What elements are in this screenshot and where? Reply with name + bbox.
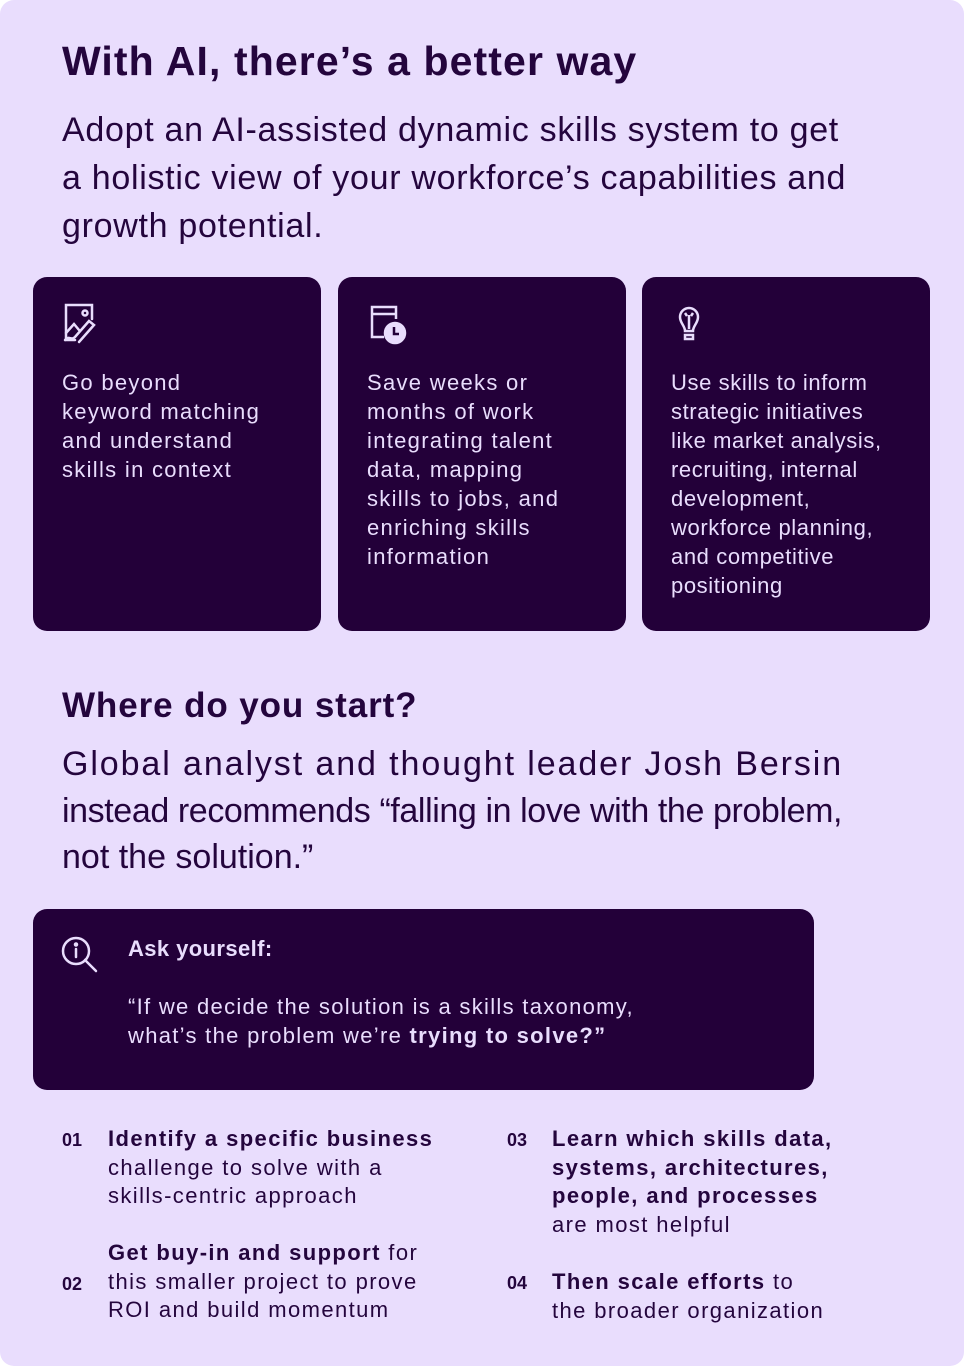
step 03: are most helpful (552, 1212, 731, 1236)
card: save time (338, 277, 626, 631)
step 04: Then scale efforts to (552, 1269, 794, 1294)
icon: image pen (64, 304, 96, 344)
card: strategy: like market analysis, (671, 428, 882, 453)
quote text: instead recommends “falling in love with the problem, (62, 792, 842, 830)
step 01 (62, 1126, 433, 1208)
step 04: the broader organization (552, 1298, 824, 1322)
step 02: ROI and build momentum (108, 1297, 389, 1322)
intro text (62, 111, 846, 245)
callout: ask yourself: what’s the problem we’re trying to solve?” (128, 1023, 606, 1048)
card: context: and understand (62, 428, 233, 453)
icon: lightbulb (678, 306, 700, 340)
step 02: Get buy-in and support for (108, 1240, 418, 1265)
card: save time: enriching skills (367, 515, 531, 540)
quote text: not the solution.” (62, 838, 313, 876)
step 03: Learn which skills data, (552, 1126, 833, 1151)
step 04 (507, 1269, 824, 1322)
step 02: this smaller project to prove (108, 1268, 418, 1294)
card: context: skills in context (62, 457, 232, 482)
card: strategy: Use skills to inform (671, 370, 868, 395)
quote text (62, 745, 843, 876)
step 03: 03 (507, 1130, 527, 1150)
card: context (33, 277, 321, 631)
step 02: 02 (62, 1274, 82, 1294)
step 01: Identify a specific business (108, 1126, 433, 1151)
card: save time: integrating talent (367, 428, 553, 453)
card: strategy: recruiting, internal (671, 457, 858, 482)
step 03 (507, 1126, 833, 1236)
card: strategy (642, 277, 930, 631)
card: save time: data, mapping (367, 457, 523, 482)
card: context: Go beyond (62, 370, 181, 395)
card: save time: months of work (367, 399, 534, 424)
heading: where do you start: Where do you start? (62, 686, 417, 725)
card: strategy: positioning (671, 573, 783, 598)
card: save time: Save weeks or (367, 370, 528, 395)
card: strategy: workforce planning, (671, 515, 873, 540)
title: With AI, there’s a better way (62, 38, 637, 84)
intro text: a holistic view of your workforce’s capabilities and (62, 159, 846, 197)
card: context: keyword matching (62, 399, 260, 424)
card: strategy: development, (671, 486, 810, 511)
step 03: systems, architectures, (552, 1154, 829, 1180)
callout: ask yourself: “If we decide the solution is a skills taxonomy, (128, 994, 634, 1019)
step 02 (62, 1240, 418, 1322)
intro text: Adopt an AI-assisted dynamic skills system to get (62, 111, 839, 149)
quote text: Global analyst and thought leader Josh Bersin (62, 745, 843, 783)
card: save time: skills to jobs, and (367, 486, 559, 511)
card: strategy: strategic initiatives (671, 399, 863, 424)
intro text: growth potential. (62, 207, 323, 245)
card: save time: information (367, 544, 490, 569)
callout: ask yourself: Ask yourself: (128, 936, 273, 961)
step 01: skills-centric approach (108, 1183, 358, 1208)
step 01: 01 (62, 1130, 82, 1150)
step 01: challenge to solve with a (108, 1154, 383, 1180)
icon: calendar clock (370, 306, 406, 344)
step 03: people, and processes (552, 1183, 819, 1208)
card: strategy: and competitive (671, 544, 834, 569)
callout: ask yourself (33, 909, 814, 1090)
icon: info magnifier (62, 936, 98, 972)
step 04: 04 (507, 1273, 527, 1293)
